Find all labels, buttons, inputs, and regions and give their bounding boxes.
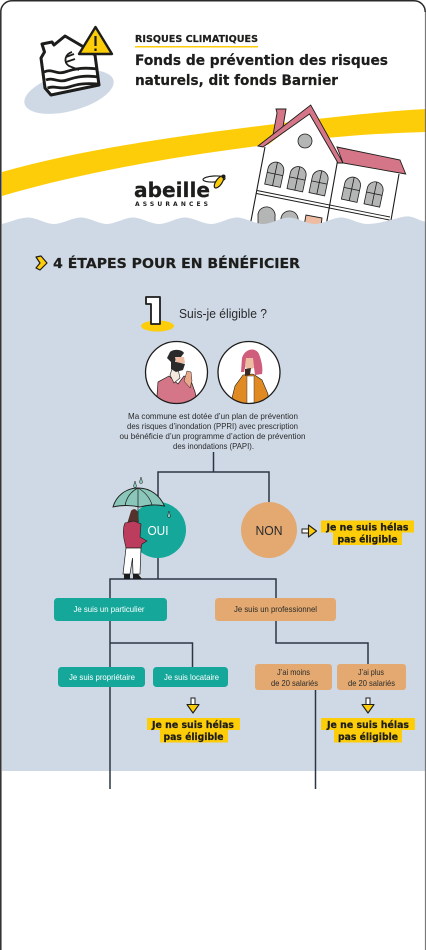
- box: locataire: [153, 667, 228, 687]
- logo: abeille assurances: [134, 174, 226, 208]
- box: moins de 20 salariés: de 20 salariés: [271, 678, 318, 688]
- step title: Suis-je éligible ?: [179, 306, 267, 321]
- box: professionnel: [215, 598, 336, 621]
- OUI circle: [130, 502, 186, 558]
- question text: [120, 411, 306, 451]
- box: propriétaire: Je suis propriétaire: [69, 672, 135, 682]
- section heading: 4 ÉTAPES POUR EN BÉNÉFICIER: [53, 255, 301, 272]
- illustration: woman under umbrella: [113, 477, 170, 579]
- callout: not eligible (plus de 20 salariés): [321, 718, 415, 743]
- title: [135, 53, 388, 89]
- NON circle: NON: [256, 523, 282, 538]
- arrow: to not eligible: [302, 525, 316, 537]
- arrow: locataire: [187, 698, 199, 713]
- box: plus de 20 salariés: de 20 salariés: [348, 678, 395, 688]
- logo: abeille assurances: ASSURANCES: [135, 201, 208, 208]
- decision tree lines: [110, 452, 368, 789]
- NON circle: [241, 502, 297, 558]
- question text: ou bénéficie d’un programme d’action de prévention: [120, 431, 306, 441]
- callout: not eligible (plus de 20 salariés): Je ne suis hélas: [326, 720, 409, 731]
- question text: Ma commune est dotée d’un plan de prévention: [128, 411, 298, 421]
- arrow: plus de 20 salariés: [362, 698, 374, 713]
- illustration: tilted house: [250, 105, 406, 226]
- callout: not eligible (NON): [321, 520, 414, 546]
- title: naturels, dit fonds Barnier: [135, 73, 338, 89]
- box: moins de 20 salariés: [255, 664, 332, 690]
- callout: not eligible (locataire): Je ne suis hélas: [151, 720, 234, 731]
- question text: des risques d’inondation (PPRI) avec prescription: [127, 421, 298, 431]
- question text: des inondations (PAPI).: [173, 441, 254, 451]
- logo: abeille assurances: abeille: [134, 178, 210, 202]
- box: plus de 20 salariés: J’ai plus: [358, 667, 384, 677]
- box: propriétaire: [58, 667, 145, 687]
- portrait: man thinking: [146, 342, 208, 410]
- callout: not eligible (NON): Je ne suis hélas: [326, 522, 409, 534]
- water background: [2, 216, 426, 771]
- callout: not eligible (plus de 20 salariés): pas éligible: [338, 732, 398, 743]
- OUI circle: OUI: [148, 523, 168, 538]
- callout: not eligible (locataire): pas éligible: [164, 732, 224, 743]
- icon: flooded house with warning: [20, 27, 118, 122]
- box: particulier: [54, 598, 167, 621]
- box: professionnel: Je suis un professionnel: [234, 604, 317, 614]
- step number 1: [141, 297, 174, 332]
- yellow swoosh: [2, 109, 426, 196]
- callout: not eligible (locataire): [147, 718, 240, 743]
- box: locataire: Je suis locataire: [164, 672, 219, 682]
- title: Fonds de prévention des risques: [135, 53, 388, 69]
- category heading: RISQUES CLIMATIQUES: [135, 34, 258, 45]
- box: moins de 20 salariés: J’ai moins: [277, 667, 310, 677]
- portrait: woman thinking: [218, 342, 280, 410]
- callout: not eligible (NON): pas éligible: [338, 534, 398, 546]
- box: plus de 20 salariés: [337, 664, 406, 690]
- box: particulier: Je suis un particulier: [74, 604, 145, 614]
